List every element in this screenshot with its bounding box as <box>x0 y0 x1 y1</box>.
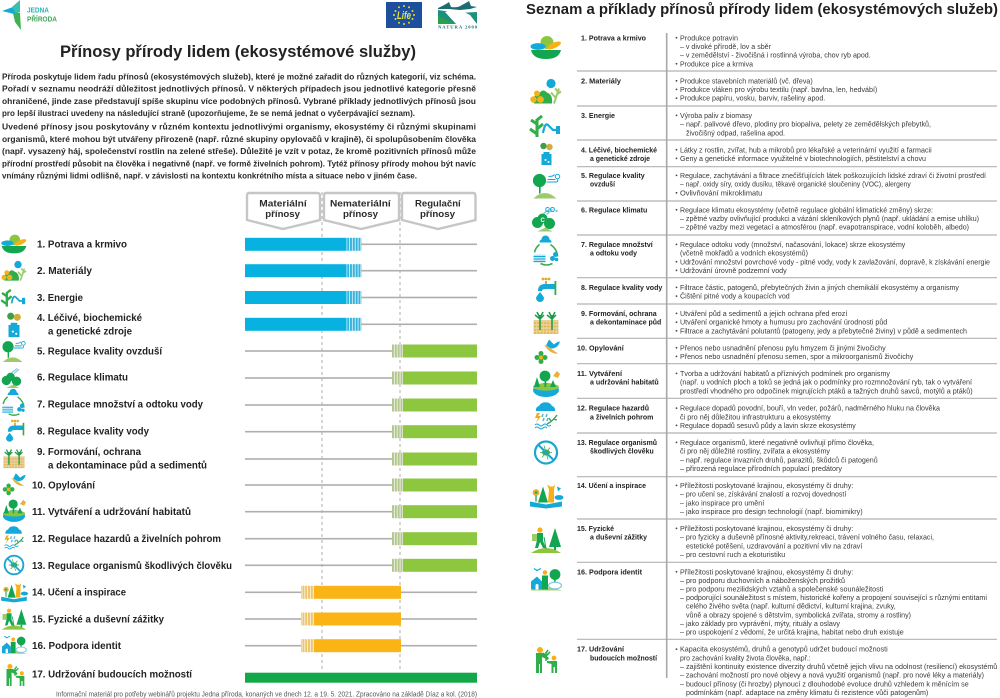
icon: pests <box>535 442 557 464</box>
description: Produkce vláken pro výrobu textilu (např. bavlna, len, hedvábí) <box>680 85 878 94</box>
row 2 bar <box>245 264 477 277</box>
logo: EU LIFE: Life <box>397 10 411 22</box>
row 15: physical and mental experiences <box>531 524 934 559</box>
row 15 bar <box>245 612 477 626</box>
description: Příležitosti poskytované krajinou, ekosystémy či druhy: <box>680 567 853 576</box>
description: Regulace organismů, které negativně ovlivňují přímo člověka, <box>680 438 874 447</box>
row 12: hazards <box>535 402 941 430</box>
label 1: 1. Potrava a krmivo <box>37 240 127 251</box>
description: – pro cestovní ruch a ekoturistiku <box>680 550 785 559</box>
label: 2. Materiály <box>581 76 622 85</box>
icon: climate <box>2 368 21 388</box>
description: vůně a obrazy spojené s dětstvím, symbolická zvířata, stromy a rostliny) <box>686 610 911 619</box>
description: Utváření půd a sedimentů a jejich ochrana před erozí <box>680 309 848 318</box>
description: – v zemědělství - živočišná i rostlinná výroba, chov ryb apod. <box>680 51 871 60</box>
icon: future options <box>6 664 24 686</box>
label <box>577 404 654 421</box>
icon: climate <box>532 207 558 232</box>
label <box>581 145 657 163</box>
label: 4. Léčivé, biochemické <box>581 145 657 154</box>
label <box>581 240 654 258</box>
label: 11. Vytváření <box>577 369 623 378</box>
label: a odtoku vody <box>590 249 638 258</box>
text block: intro paragraph 1: ohraničené, jinde zase představují spíše skupinu více podobných přínosů. Vybrané příklady jednotlivých přínosů jsou <box>2 96 476 106</box>
header: Nemateriální přínosy: Nemateriální <box>330 198 391 208</box>
description: Výroba paliv z biomasy <box>680 111 752 120</box>
label 7: 7. Regulace množství a odtoku vody <box>37 400 203 411</box>
row 5: air quality <box>533 171 987 198</box>
row 8: water quality <box>536 278 959 302</box>
text block: intro paragraph 2: organismů, které mohou být utvářeny přirozeně (např. různé skupiny opylovačů v krajině), či spolupůsobením člověka <box>2 134 476 144</box>
description <box>676 567 987 637</box>
description: či pro něj důležitou infrastrukturu a ekosystémy <box>680 412 831 421</box>
description: Filtrace částic, patogenů, přebytečných živin a jiných chemikálií ekosystémy a organismy <box>680 283 959 292</box>
label 13: 13. Regulace organismů škodlivých člověku <box>32 560 232 572</box>
description: Příležitosti poskytované krajinou, ekosystémy či druhy: <box>680 481 853 490</box>
icon: air quality <box>2 341 25 362</box>
description: Regulace dopadů povodní, bouří, vln veder, požárů, nadměrného hluku na člověka <box>680 404 941 413</box>
icon: pests <box>5 556 23 574</box>
text block: intro paragraph 2: Uvedené přínosy jsou poskytovány v různém kontextu jednotlivými organismy, ekosystémy či různými skupinami <box>2 122 476 132</box>
description: Produkce potravin <box>680 33 738 42</box>
label: 10. Opylování <box>577 343 625 352</box>
description: Produkce píce a krmiva <box>680 59 754 68</box>
label: 5. Regulace kvality <box>581 171 645 180</box>
description <box>676 645 997 697</box>
icon: identity <box>1 636 27 654</box>
row 6: climate <box>532 205 979 232</box>
description <box>676 438 878 473</box>
label 9: 9. Formování, ochrana <box>37 447 141 458</box>
header: Regulační přínosy <box>402 193 476 229</box>
description <box>676 481 863 516</box>
label: a živelních pohrom <box>590 412 654 421</box>
description: Regulace klimatu ekosystémy (včetně regulace globální klimatické změny) skrze: <box>680 205 933 214</box>
text block: intro paragraph 1 <box>2 72 476 118</box>
description: prostředí vhodného pro odpočinek migrujících ptáků a tažných druhů savců, motýlů a ptáků) <box>680 386 973 395</box>
description <box>676 76 878 103</box>
row 7: water quantity <box>534 236 990 275</box>
icon: water quality <box>536 278 556 302</box>
description <box>676 111 931 137</box>
description: Utváření organické hmoty a humusu pro zachování úrodnosti půd <box>680 318 887 327</box>
label: 8. Regulace kvality vody <box>581 283 663 292</box>
description: – pro podporu mezilidských vztahů a společenské sounáležitosti <box>680 585 884 594</box>
icon: learning <box>1 583 28 602</box>
row 5 bar <box>245 344 477 358</box>
label: a duševní zážitky <box>590 533 648 542</box>
row 1: food and feed <box>530 33 871 68</box>
row 3 bar <box>245 291 477 304</box>
label: 16. Podpora identit <box>577 567 642 576</box>
header: Materiální přínosy: přínosy <box>265 208 301 219</box>
label: ovzduší <box>590 180 616 189</box>
logo: Natura 2000 <box>438 1 478 30</box>
description: – pro učení se, získávání znalostí a rozvoj dovedností <box>680 490 847 499</box>
label: 7. Regulace množství <box>581 240 654 249</box>
description: Tvorba a udržování habitatů a příznivých podmínek pro organismy <box>680 369 890 378</box>
title: right page: Seznam a příklady přínosů přírody lidem (ekosystémových služeb) <box>526 2 998 18</box>
row 7 bar <box>245 398 477 412</box>
description: Látky z rostlin, zvířat, hub a mikrobů pro lékařské a veterinární využití a farmacii <box>680 145 932 154</box>
description: živočišný odpad, rašelina apod. <box>686 128 785 137</box>
title: left page: Přínosy přírody lidem (ekosystémové služby) <box>60 42 416 61</box>
row 6 bar <box>245 372 477 384</box>
label: 15. Fyzické <box>577 524 614 533</box>
icon: materials <box>530 79 561 104</box>
description: – jako inspirace pro design technologií (např. biomimikry) <box>680 507 863 516</box>
label 5: 5. Regulace kvality ovzduší <box>37 347 163 358</box>
description <box>676 283 959 301</box>
text block: intro paragraph 1: Pořadí v seznamu neodráží důležitost jednotlivých přínosů. V některých případech jsou jednotlivé kategorie přesně <box>2 84 476 94</box>
description <box>676 33 871 68</box>
label <box>581 309 662 327</box>
icon: soils <box>534 312 558 334</box>
icon: experiences <box>2 609 26 630</box>
row 10 bar <box>245 478 477 492</box>
description: – jako základy pro vyprávění, mýty, rituály a oslavy <box>680 619 840 628</box>
label: a dekontaminace půd <box>590 318 662 327</box>
description: (např. u vodních ploch a toků se jedná jak o podmínky pro rozmnožování ryb, tak o vytváření <box>680 378 973 387</box>
description: – přirozená regulace přírodních populací predátory <box>680 464 842 473</box>
label: 17. Udržování <box>577 645 625 654</box>
text block: intro paragraph 2: (např. vysazený háj, společenství rostlin na zelené střeše). Důležité je vzít v potaz, že kromě pozitivních přínosů může <box>2 146 476 156</box>
description: – zpětné vazby mezi vegetací a atmosférou (např. evapotranspirace, vodní koloběh, albedo) <box>680 223 969 232</box>
description: celého živého světa (např. kulturní dědictví, kulturní krajina, zvuky, <box>686 602 896 611</box>
logo: Jedna příroda <box>2 0 58 30</box>
row 13: pests <box>535 438 878 473</box>
icon: experiences <box>531 527 561 553</box>
label: budoucích možností <box>590 653 658 662</box>
row 17 bar <box>245 673 477 683</box>
description <box>676 404 941 430</box>
row 13 bar <box>245 559 477 572</box>
text block: intro paragraph 1: Příroda poskytuje lidem řadu přínosů (ekosystémových služeb), které je možné zařadit do různých kategorií, viz schéma. <box>2 72 476 82</box>
description: – pro uspokojení z vědomí, že určitá krajina, habitat nebo druh existuje <box>680 628 904 637</box>
description <box>676 369 973 395</box>
description: – např. oxidy síry, oxidy dusíku, těkavé organické sloučeniny (VOC), alergeny <box>680 180 911 189</box>
description: – zpětné vazby ovlivňující produkci a vázání skleníkových plynů (např. ukládání a emise uhlíku) <box>680 214 979 223</box>
description: – v divoké přírodě, lov a sběr <box>680 42 771 51</box>
description: Udržování úrovně podzemní vody <box>680 266 787 275</box>
row 10: pollination <box>534 340 913 364</box>
icon: energy <box>530 116 560 137</box>
icon: learning <box>530 484 564 508</box>
label 4: 4. Léčivé, biochemické <box>37 313 142 324</box>
icon: food <box>530 36 562 59</box>
description: Ovlivňování mikroklimatu <box>680 188 762 197</box>
description: pro zachování kvality života člověka, např.: <box>680 653 811 662</box>
label 8: 8. Regulace kvality vody <box>37 427 149 438</box>
icon: food <box>1 235 27 253</box>
icon: materials <box>1 261 26 281</box>
row 14: learning and inspiration <box>530 481 863 516</box>
description: (včetně mokřadů a vodních ekosystémů) <box>680 249 808 258</box>
label <box>577 645 658 662</box>
row 4 bar <box>245 318 477 331</box>
header: Regulační přínosy: přínosy <box>420 208 456 219</box>
label: 13. Regulace organismů <box>577 438 657 447</box>
header: Nemateriální přínosy <box>324 193 399 229</box>
description: – např. regulace invazních druhů, parazitů, škůdců či patogenů <box>680 455 878 464</box>
text block: intro paragraph 2: vnímány různými lidmi odlišně, např. v závislosti na kontextu konkrétního místa a situace nebo v jiném čase. <box>2 171 417 181</box>
icon: soils <box>3 450 25 468</box>
label: 14. Učení a inspirace <box>577 481 646 490</box>
icon: identity <box>530 568 562 590</box>
row 1 bar <box>245 238 477 251</box>
icon: medicine <box>540 143 553 165</box>
description: či pro něj důležité rostliny, zvířata a ekosystémy <box>680 447 830 456</box>
label 6: 6. Regulace klimatu <box>37 373 128 384</box>
description: Přenos nebo usnadnění přenosu pylu hmyzem či jinými živočichy <box>680 343 886 352</box>
row 14 bar <box>245 586 477 599</box>
icon: pollination <box>534 340 560 364</box>
description: Kapacita ekosystémů, druhů a genotypů udržet budoucí možnosti <box>680 645 888 654</box>
label: 9. Formování, ochrana <box>581 309 657 318</box>
label 15: 15. Fyzické a duševní zážitky <box>32 615 164 626</box>
row 11: habitats <box>533 369 973 397</box>
label: 3. Energie <box>581 111 615 120</box>
description: Příležitosti poskytované krajinou, ekosystémy či druhy: <box>680 524 853 533</box>
logo: Jedna příroda: JEDNA <box>27 6 50 15</box>
label 2: 2. Materiály <box>37 266 92 277</box>
label 17: 17. Udržování budoucích možností <box>32 669 193 680</box>
description: – budoucí přínosy (či hrozby) plynoucí z dlouhodobé evoluce druhů vzhledem k měnícím se <box>680 679 969 688</box>
icon: air quality <box>533 174 560 198</box>
row 8 bar <box>245 425 477 438</box>
logo: Jedna příroda: PŘÍRODA <box>27 15 58 24</box>
label <box>581 171 645 189</box>
row 12 bar <box>245 532 477 545</box>
description <box>676 524 934 559</box>
label <box>577 369 659 387</box>
description: Regulace odtoku vody (množství, načasování, lokace) skrze ekosystémy <box>680 240 905 249</box>
table: list of benefits and examples <box>530 33 997 697</box>
icon: water quantity <box>2 389 25 415</box>
row 9: soils <box>534 309 967 335</box>
icon: medicine <box>7 313 21 337</box>
text block: intro paragraph 2 <box>2 122 476 181</box>
label 12: 12. Regulace hazardů a živelních pohrom <box>32 533 221 545</box>
description: Přenos nebo usnadnění přenosu semen, spor a mikroorganismů živočichy <box>680 352 913 361</box>
label: škodlivých člověku <box>590 447 654 456</box>
description <box>676 309 967 335</box>
description <box>676 145 932 163</box>
description: Produkce papíru, vosku, barviv, rašeliny apod. <box>680 94 825 103</box>
label: a genetické zdroje <box>590 154 650 163</box>
header: Regulační přínosy: Regulační <box>415 198 461 208</box>
label 9 <box>37 447 207 472</box>
row 16 bar <box>245 639 477 652</box>
icon: habitats <box>3 499 26 522</box>
icon: hazards <box>5 526 23 549</box>
label 9: a dekontaminace půd a sedimentů <box>48 460 207 472</box>
row 17: future options <box>536 645 997 697</box>
label: 12. Regulace hazardů <box>577 404 649 413</box>
icon: pollination <box>3 473 26 495</box>
label <box>577 438 657 456</box>
icon: hazards <box>535 402 557 429</box>
icon: climate: C <box>540 218 546 224</box>
icon: water quantity <box>534 236 558 265</box>
description: – jako inspirace pro umění <box>680 498 765 507</box>
label: a udržování habitatů <box>590 378 659 387</box>
header: Materiální přínosy: Materiální <box>259 198 307 208</box>
description <box>676 240 990 275</box>
description <box>676 343 913 361</box>
row 4: medicinal resources <box>540 143 932 165</box>
label: 1. Potrava a krmivo <box>581 33 646 42</box>
description: – podporující sounáležitost s místem, historické kořeny a propojení související s různými entitami <box>680 593 987 602</box>
category labels and icons: left page <box>1 235 232 686</box>
description: – pro fyzicky a duševně přínosné aktivity,rekreaci, trávení volného času, relaxaci, <box>680 533 934 542</box>
header: Materiální přínosy <box>247 193 320 229</box>
icon: future options <box>536 647 557 673</box>
description: – zachování možností pro nové objevy a nová využití organismů (např. pro nové léky a materiály) <box>680 671 984 680</box>
row 2: materials <box>530 76 878 104</box>
row 11 bar <box>245 505 477 518</box>
label 16: 16. Podpora identit <box>32 641 122 652</box>
description: – pro podporu duchovních a náboženských prožitků <box>680 576 845 585</box>
label 11: 11. Vytváření a udržování habitatů <box>32 506 191 518</box>
icon: energy <box>1 290 25 307</box>
description: Geny a genetické informace využitelné v biotechnologiích, pěstitelství a chovu <box>680 154 926 163</box>
description <box>676 205 979 232</box>
icon: habitats <box>533 371 560 397</box>
label 14: 14. Učení a inspirace <box>32 588 126 599</box>
description: Čištění pitné vody a koupacích vod <box>680 292 790 301</box>
header: Nemateriální přínosy: přínosy <box>343 208 379 219</box>
description: Regulace dopadů sesuvů půdy a lavin skrze ekosystémy <box>680 421 856 430</box>
icon: climate: CO₂ <box>545 207 558 214</box>
description: podmínkám (např. adaptace na změny klimatu či rezistence vůči patogenům) <box>686 688 929 697</box>
label <box>577 524 648 542</box>
label 4 <box>37 313 142 338</box>
label 10: 10. Opylování <box>32 481 96 492</box>
description: estetické potěšení, uzdravování a pozitivní vliv na zdraví <box>686 541 863 550</box>
label 3: 3. Energie <box>37 293 83 304</box>
description: Filtrace a zachytávání polutantů (patogeny, jedy a přebytečné živiny) v půdě a sedimentech <box>680 326 967 335</box>
chart: benefit categories matrix <box>245 192 477 683</box>
label 4: a genetické zdroje <box>48 327 132 338</box>
description <box>676 171 987 197</box>
logo: Natura 2000: NATURA 2000 <box>438 24 478 30</box>
label: 6. Regulace klimatu <box>581 205 648 214</box>
description: – např. palivové dřevo, plodiny pro biopaliva, pelety ze zemědělských přebytků, <box>680 120 931 129</box>
description: Produkce stavebních materiálů (vč. dřeva) <box>680 76 813 85</box>
text block: intro paragraph 1: pro lepší ilustraci uvedeny na následující straně (upozorňujeme, že se nemá jednat o vyčerpávající seznam). <box>2 108 415 118</box>
logo: EU LIFE <box>386 2 422 28</box>
row 3: energy <box>530 111 931 137</box>
icon: water quality <box>6 420 24 442</box>
text block: intro paragraph 2: přírodní prostředí působit na člověka i negativně (např. ve formě živelních pohrom). Tytéž přínosy přírody mohou být navíc <box>2 158 476 168</box>
row 9 bar <box>245 452 477 466</box>
row 16: identity <box>530 567 987 637</box>
